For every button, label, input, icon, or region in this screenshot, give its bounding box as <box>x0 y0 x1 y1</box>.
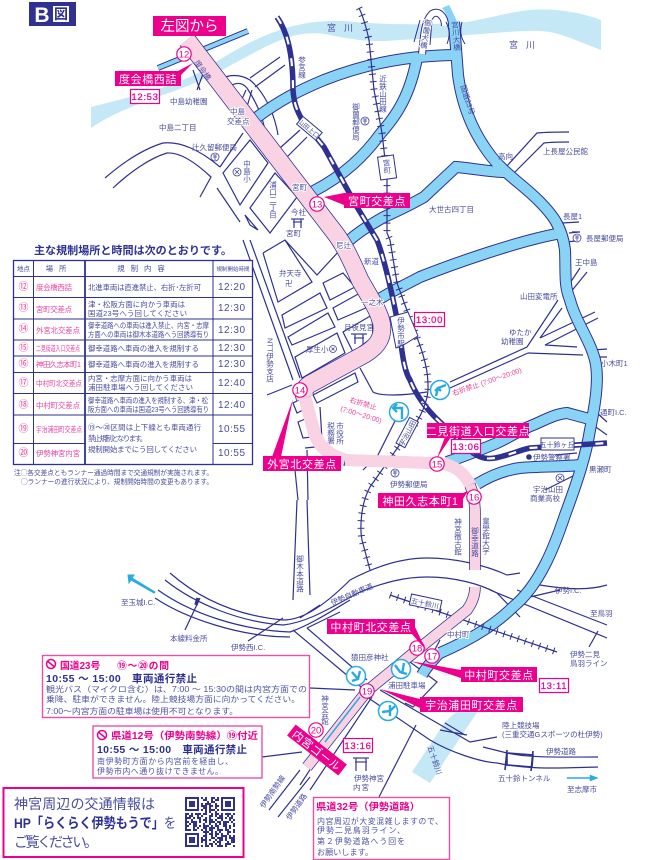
point 16 marker <box>467 490 481 504</box>
map place labels: 幼稚園 <box>501 336 524 346</box>
map place labels: 御薗郵便局 <box>351 102 360 142</box>
icon: traffic direction 4 <box>392 660 410 678</box>
map place labels: 尼辻 <box>336 240 351 250</box>
station label: 伊勢市駅: 伊勢市駅 <box>396 316 406 348</box>
point 14 marker: 14 <box>295 386 305 396</box>
map place labels: 中島二丁目 <box>159 122 196 132</box>
map place labels: 中島小 <box>242 159 252 184</box>
station label: 五十鈴川 <box>409 594 442 611</box>
map place labels: 伊勢南勢線 <box>257 773 287 810</box>
callout: 県道12号: 県道12号（伊勢南勢線）⑲付近 <box>111 729 258 742</box>
map place labels: 度会橋 <box>192 58 214 82</box>
map place labels: 宮川大橋 <box>450 19 462 52</box>
regulation table: ⑲〜⑳区間は上下線とも車両通行 <box>88 423 202 432</box>
station label: 宇治山田: 宇治山田 <box>397 419 418 448</box>
point 13 marker: 13 <box>312 200 322 210</box>
river: 五十鈴川 <box>412 695 484 783</box>
regulation table: 方面への車両は御木本道路へう回誘導有り <box>88 330 209 339</box>
callout: 県道12号: 10:55 〜 15:00 車両通行禁止 <box>97 743 248 756</box>
map place labels: 鳥羽ライン <box>570 658 608 668</box>
callout: 県道32号: お願いします。 <box>317 848 373 857</box>
regulation table: 浦田駐車場へう回してください <box>88 383 193 392</box>
map place labels: 御薗大橋 <box>418 17 433 51</box>
regulation table: 規制開始時間 <box>216 265 250 273</box>
icon: QR code <box>185 797 235 847</box>
map place labels: 長屋1 <box>563 212 582 221</box>
station label: 五十鈴ヶ丘 <box>540 438 574 450</box>
station label: 伊勢市駅 <box>390 312 418 348</box>
label: 宮町交差点: 宮町交差点 <box>348 195 406 208</box>
callout: 国道23号: ⑲〜⑳の間 <box>117 660 169 672</box>
map place labels: 中村町 <box>447 629 470 639</box>
map place labels: 今社 <box>291 207 306 217</box>
point 18 marker: 18 <box>412 644 422 654</box>
point 15 marker: 15 <box>432 460 442 470</box>
map place labels <box>121 17 628 822</box>
callout: 県道32号: 県道32号（伊勢道路） <box>316 800 420 813</box>
panel: traffic info link <box>4 788 244 857</box>
right turn prohibited note 1 <box>339 395 382 425</box>
map place labels: 御木本道路 <box>295 554 304 593</box>
map place labels: 宮川 <box>327 22 361 33</box>
regulation table: ⑱ <box>18 399 28 411</box>
marathon route <box>187 40 475 767</box>
callout: 国道23号: 国道23号 <box>60 659 100 672</box>
label: 中村町北交差点 <box>327 619 426 650</box>
label: 外宮北交差点 <box>263 399 341 471</box>
regulation table: ⑲ <box>18 423 28 435</box>
map place labels: 至鳥羽 <box>590 608 612 618</box>
callout: 県道32号 <box>314 798 450 860</box>
time: 13:06: 13:06 <box>452 442 480 453</box>
label: 左図から: 左図から <box>160 18 218 35</box>
station label: 宮町: 宮町 <box>381 157 392 175</box>
map place labels: 市役所 <box>335 421 344 446</box>
regulation table: ⑬ <box>18 302 28 314</box>
callout: 県道32号: 伊勢二見鳥羽ライン、 <box>317 825 405 835</box>
regulation table: 二見街道入口交差点 <box>36 344 80 353</box>
map place labels: 伊勢二見 <box>570 649 600 659</box>
point 20 marker <box>309 723 323 737</box>
map place labels: 浦田駐車場 <box>388 680 426 690</box>
regulation table: 10:55 <box>218 448 245 459</box>
regulation table: 御幸道路へ車両の進入を規制する <box>88 344 199 353</box>
map place labels: 弁天寺 <box>279 268 302 278</box>
table heading: 主な規制場所と時間は次のとおりです。 <box>34 243 232 257</box>
panel: traffic info link: 神宮周辺の交通情報は <box>14 796 155 812</box>
map place labels: 至志摩市 <box>567 784 597 794</box>
station label: 五十鈴ヶ丘: 五十鈴ヶ丘 <box>540 440 574 449</box>
map place labels: 宮川 <box>509 39 543 50</box>
point 19 marker: 19 <box>362 686 372 698</box>
point 12 marker <box>177 47 191 61</box>
time: 12:53: 12:53 <box>131 92 159 103</box>
point 17 marker <box>425 649 439 663</box>
map place labels: 宮町 <box>286 228 301 238</box>
map place labels: 月夜見宮 <box>344 322 374 332</box>
map place labels: 高向 <box>498 151 513 161</box>
regulation table: 内宮・志摩方面に向かう車両は <box>88 374 193 383</box>
icon: traffic direction 1 <box>390 402 408 422</box>
map place labels: 大世古四丁目 <box>429 204 474 214</box>
regulation table: 12:30 <box>218 343 245 354</box>
icon: traffic direction 2 <box>430 380 450 400</box>
map place labels: 皇學館大学 <box>481 516 490 555</box>
station label: 五十鈴川: 五十鈴川 <box>410 596 440 611</box>
map place labels: 神宮徴古館 <box>453 517 462 557</box>
map place labels: (三重交通Gスポーツの杜伊勢) <box>502 729 603 739</box>
label: 内宮ゴール: 内宮ゴール <box>290 727 344 774</box>
map place labels: 内宮 <box>353 782 370 792</box>
table notes: 注◯各交差点ともランナー通過時間まで交通規制が実施されます。 <box>14 468 213 477</box>
point 20 marker: 20 <box>311 726 321 736</box>
regulation table: 12:30 <box>218 303 245 314</box>
map symbols: post offices, schools, shrines <box>211 117 581 482</box>
label: 中村町北交差点: 中村町北交差点 <box>330 620 412 634</box>
map place labels: 伊勢自動車道 <box>329 580 375 607</box>
label: 度会橋西詰: 度会橋西詰 <box>119 72 177 86</box>
point 15 marker <box>430 457 444 471</box>
map place labels: ゆたか <box>509 328 532 337</box>
arrow: 至志摩市 <box>567 775 598 781</box>
regulation table: 規制内容 <box>117 264 171 273</box>
map place labels: 厚生小 <box>306 344 329 354</box>
icon: traffic direction 3 <box>346 666 366 686</box>
regulation table: 神田久志本町1 <box>36 360 81 369</box>
map place labels: 近鉄山田線 <box>378 74 388 114</box>
icon: torii marks <box>291 219 369 771</box>
regulation table: 規制開始までにう回してください <box>88 445 197 454</box>
regulation table: 宮町交差点 <box>36 305 73 314</box>
regulation table: 12:40 <box>218 378 245 389</box>
time: 13:00: 13:00 <box>416 315 443 326</box>
regulation table: ⑯ <box>18 358 28 370</box>
minor roads <box>105 55 607 817</box>
regulation table: 度会橋西詰 <box>36 283 73 292</box>
map place labels: 本線料金所 <box>170 633 208 643</box>
badge: B図: B <box>34 4 50 27</box>
point 12 marker: 12 <box>179 50 189 60</box>
map place labels: 黒瀬町 <box>589 464 612 474</box>
callout: 県道12号: 南伊勢町方面から内宮前を経由し、 <box>97 756 233 766</box>
panel: traffic info link: HP「らくらく伊勢もうで」を <box>14 815 176 831</box>
map place labels: 新道 <box>364 256 379 266</box>
map place labels: NTT伊勢支店 <box>265 338 274 384</box>
map place labels: 猿田彦神社 <box>351 652 389 662</box>
toll gate marker <box>196 598 198 605</box>
point 17 marker: 17 <box>427 652 437 662</box>
map place labels: 商業高校 <box>530 493 560 503</box>
regulation table: 12:20 <box>218 282 245 293</box>
map place labels: 伊勢神宮 <box>354 773 384 783</box>
label: 度会橋西詰 <box>115 63 193 86</box>
map place labels: 宮町 <box>292 182 307 192</box>
callout: 県道12号 <box>93 726 262 778</box>
label: 神田久志本町1 <box>378 491 468 508</box>
regulation table: 中村町交差点 <box>36 401 81 410</box>
map place labels: 参宮線 <box>297 55 306 80</box>
river: 宮川 <box>91 9 601 128</box>
regulation table: 御幸道路への車両は進入禁止、内宮・志摩 <box>88 321 210 330</box>
callout: 国道23号 <box>42 656 310 718</box>
regulation table: 国道23号へう回してください <box>88 309 187 318</box>
map place labels: 伊勢道路 <box>283 791 309 822</box>
map place labels: 五十鈴川 <box>426 744 444 776</box>
map place labels: 伊勢警察署 <box>533 452 571 462</box>
map place labels: 伊勢道路 <box>546 746 576 756</box>
map place labels: 一之木 <box>361 297 384 307</box>
railway: 近鉄山田線 <box>359 8 557 652</box>
label: 左図から <box>153 16 226 36</box>
point 16 marker: 16 <box>469 492 479 504</box>
callout: 国道23号: 7:00〜内宮方面の駐車場は使用不可となります。 <box>46 706 238 716</box>
map place labels: 伊勢I.C. <box>555 585 582 595</box>
point 14 marker <box>293 383 307 397</box>
badge: B図 <box>29 2 76 27</box>
map place labels: 伊勢西I.C. <box>231 642 265 652</box>
table notes <box>14 468 213 486</box>
station label: 宮町 <box>378 155 397 180</box>
map place labels: 至玉城I.C. <box>121 598 155 607</box>
station label: 山田上口: 山田上口 <box>296 117 322 140</box>
label: 神田久志本町1: 神田久志本町1 <box>382 494 459 508</box>
blue main roads <box>158 22 597 675</box>
point 13 marker <box>310 197 324 211</box>
map place labels: 陸上競技場 <box>502 720 540 730</box>
table notes: ◯ランナーの進行状況により、規制開始時間の変更もあります。 <box>21 477 213 486</box>
regulation table: ⑳ <box>18 447 28 459</box>
regulation table: 10:55 <box>218 424 245 435</box>
map place labels: 山田変電所 <box>520 291 558 301</box>
label: 宇治浦田町交差点: 宇治浦田町交差点 <box>425 698 518 712</box>
regulation table: 阪方面への車両は国道23号へう回誘導有り <box>88 405 209 414</box>
railway: JR 参宮線 <box>277 17 607 458</box>
panel: traffic info link: ご覧ください。 <box>14 834 98 850</box>
callout: 県道32号: 第２伊勢道路へう回を <box>317 836 405 846</box>
time: 13:16: 13:16 <box>344 741 372 752</box>
map place labels: 中島幼稚園 <box>170 96 208 106</box>
map place labels: 御幸道路 <box>470 526 480 557</box>
regulation table <box>13 260 252 464</box>
map place labels: 通町I.C. <box>600 407 627 417</box>
regulation table: 北進車両は直進禁止、右折･左折可 <box>88 283 201 292</box>
regulation table: 津・松阪方面に向かう車両は <box>88 300 186 309</box>
map place labels: 税務署 <box>326 421 336 446</box>
label: 中村町交差点: 中村町交差点 <box>464 668 534 682</box>
regulation table: 禁止規制となります。 <box>88 434 147 443</box>
map place labels: 辻久留郵便局 <box>192 142 237 152</box>
callout: 県道32号: 内宮周辺が大変混雑しますので、 <box>317 816 443 826</box>
map place labels: 長屋郵便局 <box>586 233 624 243</box>
regulation table: 12:30 <box>218 325 245 336</box>
map place labels: 浦口二丁目 <box>268 180 278 220</box>
map place labels: 神宮会館 <box>320 694 330 726</box>
regulation table: 御幸道路へ車両の進入を規制する <box>88 360 199 369</box>
time: 13:11: 13:11 <box>541 681 567 692</box>
regulation table: ⑮ <box>18 342 28 354</box>
badge: B図: 図 <box>54 6 68 22</box>
regulation table: ⑰ <box>18 377 28 389</box>
regulation table: 中村町北交差点 <box>36 379 83 388</box>
regulation table: 場所 <box>46 264 72 273</box>
map place labels: 五十鈴トンネル <box>498 773 551 783</box>
regulation table: 外宮北交差点 <box>36 326 81 335</box>
point 18 marker <box>410 641 424 655</box>
map place labels: 交差点 <box>227 116 250 126</box>
bridges over 宮川 <box>414 5 465 54</box>
point 19 marker <box>360 684 374 698</box>
regulation table: 12:30 <box>218 359 245 370</box>
tunnel: 五十鈴トンネル <box>505 750 533 771</box>
label: 二見街道入口交差点: 二見街道入口交差点 <box>426 424 530 438</box>
map place labels: 小木町1 <box>601 358 628 368</box>
regulation table: 12:40 <box>218 400 245 411</box>
right turn prohibited note 1: 右折禁止 <box>348 395 378 412</box>
label: 中村町交差点 <box>410 661 537 682</box>
map place labels: 卍 <box>285 279 292 288</box>
icon: police dot <box>526 454 532 460</box>
label: 二見街道入口交差点 <box>426 423 530 458</box>
map place labels: 国道23号 <box>458 83 478 116</box>
map place labels: 宇治山田 <box>533 484 563 494</box>
map place labels: 伊勢郵便局 <box>390 479 428 489</box>
regulation table: 御幸道路へ車両の進入を規制する、津・松 <box>88 396 209 405</box>
callout: 国道23号: 乗降、駐車ができません。陸上競技場方面に向かってください。 <box>46 694 300 704</box>
label: 宇治浦田町交差点 <box>380 689 523 712</box>
callout: 国道23号: 10:55 〜 15:00 車両通行禁止 <box>46 672 198 685</box>
regulation table: 伊勢神宮内宮 <box>36 449 80 458</box>
regulation table: ⑫ <box>18 281 28 293</box>
callout: 国道23号: 観光バス（マイクロ含む）は、7:00 〜 15:30の間は内宮方面での <box>46 684 307 694</box>
arrow: 至玉城I.C. <box>128 575 155 593</box>
regulation table: 地点 <box>17 264 30 273</box>
regulation table: ⑭ <box>18 323 28 335</box>
regulation table: 宇治浦田町交差点 <box>36 425 82 434</box>
map place labels: 王中島 <box>575 257 598 267</box>
icon: traffic direction 5 <box>378 702 398 720</box>
right turn prohibited note 1: (7:00〜20:00) <box>339 406 382 425</box>
right turn prohibited note 2: 右折禁止 (7:00〜20:00) <box>451 365 523 398</box>
label: 外宮北交差点: 外宮北交差点 <box>267 458 337 471</box>
label: 宮町交差点 <box>324 193 410 208</box>
map place labels: 中島 <box>230 106 245 116</box>
map place labels: 上長屋公民館 <box>543 147 588 156</box>
callout: 県道12号: 伊勢市内へ通り抜けできません。 <box>97 766 223 776</box>
